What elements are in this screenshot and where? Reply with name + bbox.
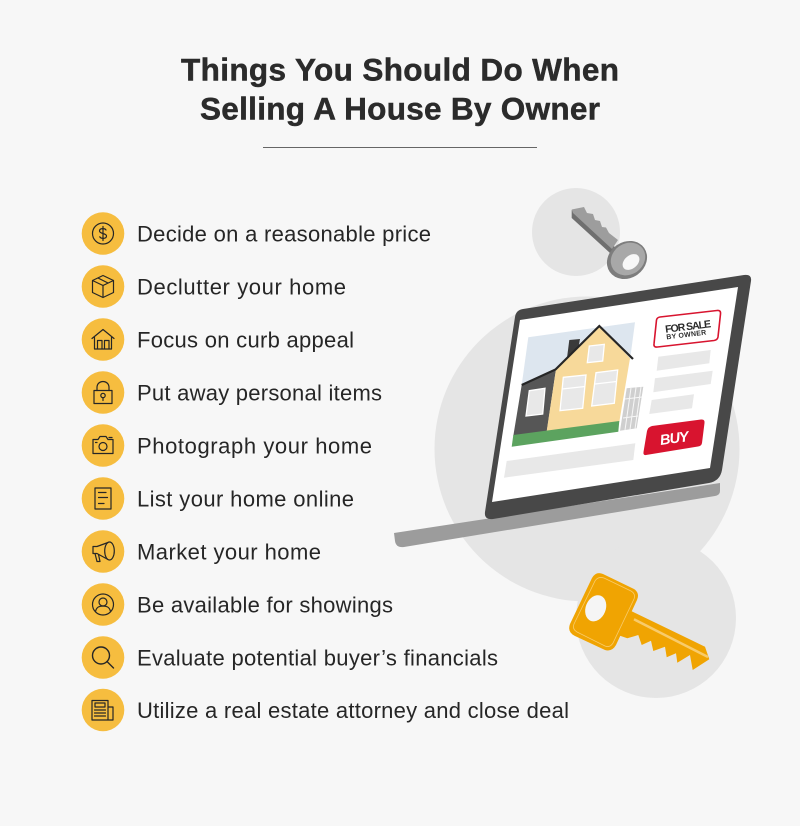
laptop bezel xyxy=(485,275,751,519)
item: market: Market your home xyxy=(137,540,321,564)
item: market xyxy=(82,530,321,573)
item: financials xyxy=(82,636,498,679)
item: attorney xyxy=(82,689,569,731)
buy button xyxy=(643,419,705,455)
item: list online xyxy=(82,477,354,520)
form fields xyxy=(504,350,713,478)
for sale sign: FOR SALE xyxy=(665,318,712,336)
item: personal items: Put away personal items xyxy=(137,380,382,406)
item: personal items xyxy=(82,371,382,414)
title: Things You Should Do When xyxy=(181,52,619,88)
item: showings xyxy=(82,583,393,626)
item: list online: List your home online xyxy=(137,486,354,512)
for sale sign xyxy=(654,310,721,347)
item: photograph xyxy=(82,424,372,467)
item: declutter xyxy=(82,265,346,308)
item: decide on price xyxy=(82,212,431,255)
item: financials: Evaluate potential buyer’s financials xyxy=(137,646,498,670)
item: curb appeal: Focus on curb appeal xyxy=(137,328,354,352)
item: photograph: Photograph your home xyxy=(137,434,372,458)
background circles xyxy=(434,188,740,698)
laptop base xyxy=(394,483,720,547)
buy button: BUY xyxy=(659,429,691,449)
item: attorney: Utilize a real estate attorney and close deal xyxy=(137,698,569,723)
for sale sign: BY OWNER xyxy=(666,330,707,341)
laptop screen xyxy=(492,287,738,502)
item: declutter: Declutter your home xyxy=(137,274,346,300)
checklist xyxy=(82,212,569,731)
icon: silver key xyxy=(572,207,655,287)
house picture xyxy=(512,322,643,447)
item: showings: Be available for showings xyxy=(137,592,393,618)
icon: gold key xyxy=(569,573,709,670)
item: curb appeal xyxy=(82,318,354,361)
item: decide on price: Decide on a reasonable price xyxy=(137,222,431,246)
title: Selling A House By Owner xyxy=(200,90,600,126)
title xyxy=(181,52,619,126)
icon: laptop xyxy=(394,275,751,547)
